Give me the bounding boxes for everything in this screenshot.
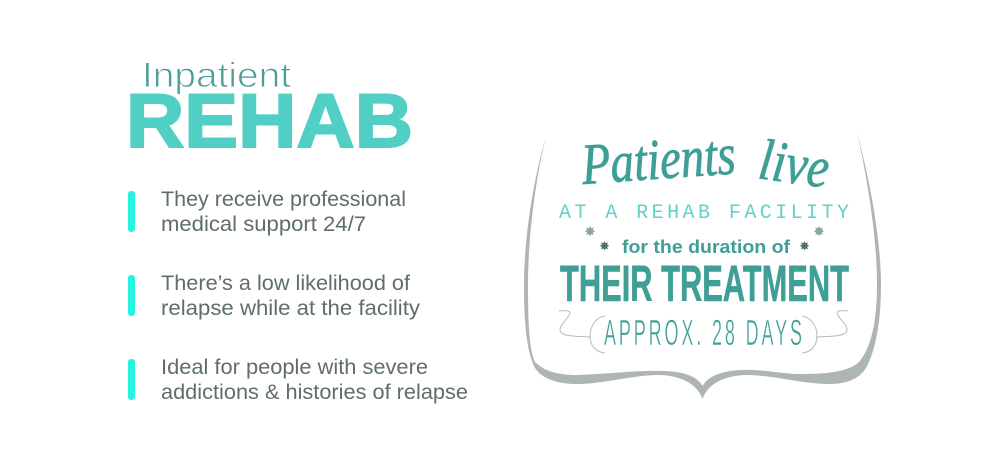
bullet 3 text: Ideal for people with severe xyxy=(161,356,428,379)
text: approx. 28 days: APPROX. 28 DAYS xyxy=(604,313,802,354)
script heading: Patients live: Patients xyxy=(579,121,738,197)
bullet 1 text: medical support 24/7 xyxy=(161,213,366,236)
title: REHAB: REHAB xyxy=(126,79,413,164)
bullet list xyxy=(128,188,468,404)
callout panel: patients live at a rehab facility xyxy=(524,121,881,399)
bullet 1 marker xyxy=(128,191,135,232)
bullet 2 text: There’s a low likelihood of xyxy=(161,272,410,295)
bullet 2 marker xyxy=(128,275,135,316)
star ornament xyxy=(585,226,595,236)
bullet 3 marker xyxy=(128,359,135,400)
bullet 1 text: They receive professional xyxy=(161,188,406,211)
star ornament xyxy=(814,226,824,236)
text: for the duration of: for the duration of xyxy=(622,237,791,257)
bullet 3 text: addictions & histories of relapse xyxy=(161,381,468,404)
decorative bracket frame xyxy=(524,133,881,399)
star ornament xyxy=(800,241,809,251)
subheading: at a rehab facility: AT A REHAB FACILITY xyxy=(559,202,849,225)
ribbon ornament xyxy=(559,311,848,353)
script heading: Patients live: live xyxy=(755,127,834,201)
star ornament xyxy=(600,241,609,251)
title: Inpatient: Inpatient xyxy=(142,56,291,95)
bullet 2 text: relapse while at the facility xyxy=(161,297,421,320)
